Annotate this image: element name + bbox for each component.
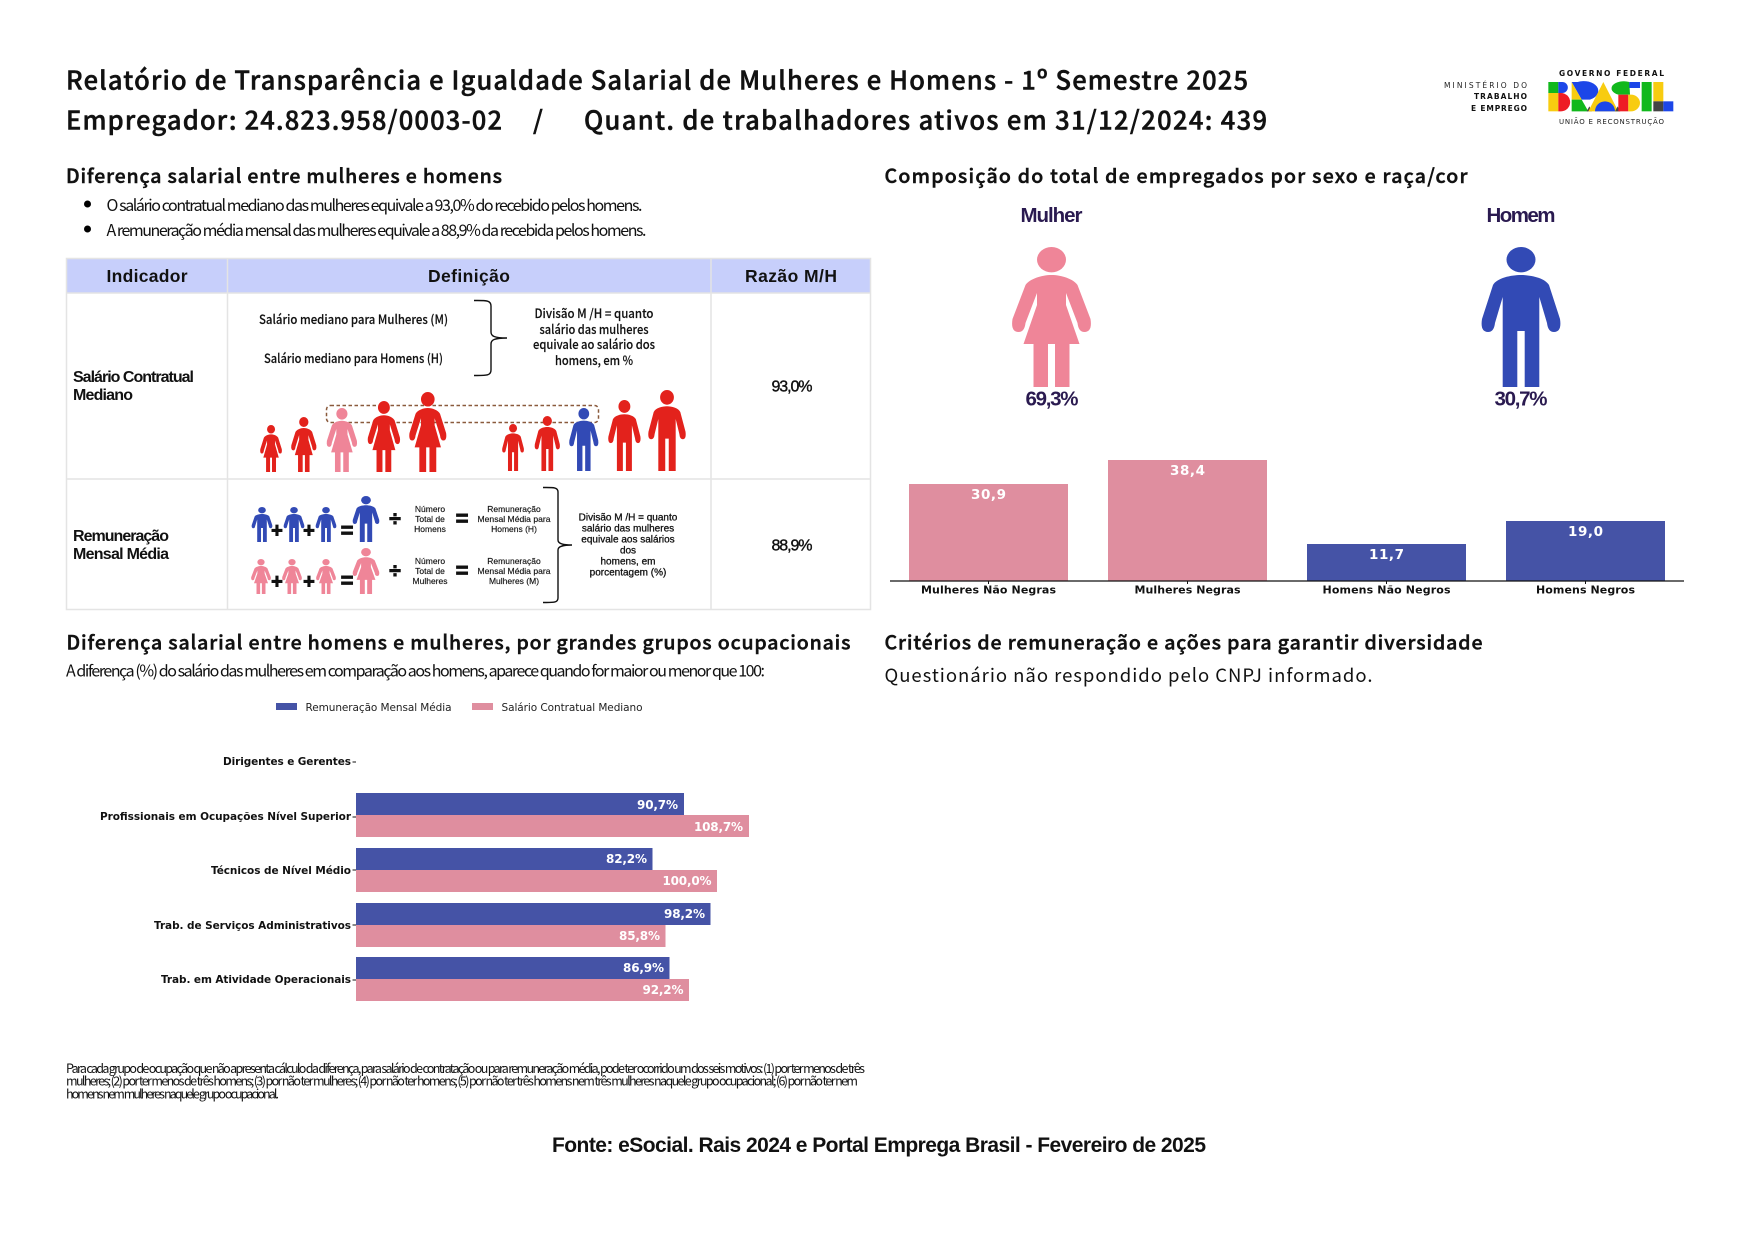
bar chart: sexo e raça/cor: Mulheres Não Negras bbox=[921, 584, 1056, 596]
brace and division text: equivale aos salários bbox=[581, 534, 675, 546]
title bbox=[66, 60, 1267, 138]
definição: salário mediano: Divisão M /H = quanto bbox=[534, 303, 654, 322]
definição: salário mediano: Salário mediano para Homens (H) bbox=[264, 348, 443, 367]
text: questionário: Questionário não respondido pelo CNPJ informado. bbox=[884, 662, 1372, 688]
bar chart: sexo e raça/cor: 11,7 bbox=[1369, 547, 1404, 563]
definição: mulheres: Remuneração bbox=[487, 556, 541, 566]
table header: Indicador bbox=[106, 266, 188, 286]
row label: remuneração mensal média: Remuneração bbox=[73, 528, 169, 545]
bar chart: grupos ocupacionais bbox=[100, 756, 749, 1001]
group: atividade operacionais: 86,9% bbox=[623, 961, 664, 975]
definição: mulheres: Total de bbox=[415, 566, 445, 576]
definição: mulheres: = bbox=[456, 558, 468, 583]
razão: salário: 93,0% bbox=[772, 378, 812, 396]
pictogram: mulher 69,3% bbox=[1012, 204, 1091, 410]
definição: homens: Homens bbox=[414, 524, 446, 534]
heading: diferença por grandes grupos: Diferença salarial entre homens e mulheres, por grandes grupos ocupacionais bbox=[66, 626, 850, 656]
footnote: mulheres; (2) por ter menos de três homens; (3) por não ter mulheres; (4) por não ter homens; (5) por não ter três homens nem três mulheres naquele grupo ocupacional; (6) por não ter nem bbox=[66, 1070, 858, 1090]
pictogram: mulher 69,3%: Mulher bbox=[1020, 204, 1083, 227]
definição: homens bbox=[252, 496, 551, 543]
definição: salário mediano: Salário mediano para Mulheres (M) bbox=[259, 309, 448, 328]
chart legend: Salário Contratual Mediano bbox=[502, 702, 642, 714]
heading: composição: Composição do total de empregados por sexo e raça/cor bbox=[884, 160, 1468, 189]
definição: homens: Número bbox=[415, 504, 445, 514]
title: Empregador: 24.823.958/0003-02 bbox=[66, 100, 502, 138]
definição: mulheres: + bbox=[303, 571, 315, 593]
definição: homens: = bbox=[456, 506, 468, 531]
logo: Ministério do Trabalho e Emprego: E EMPREGO bbox=[1471, 104, 1527, 113]
footnote: homens nem mulheres naquele grupo ocupacional. bbox=[66, 1084, 279, 1102]
group: atividade operacionais: 92,2% bbox=[642, 983, 684, 997]
row label: salário contratual mediano bbox=[73, 369, 194, 404]
definição: homens: = bbox=[341, 518, 353, 543]
logo: Ministério do Trabalho e Emprego: TRABALHO bbox=[1474, 92, 1527, 101]
definição: homens: + bbox=[271, 520, 283, 542]
logo: Ministério do Trabalho e Emprego: MINISTÉRIO DO bbox=[1444, 81, 1527, 90]
group: dirigentes e gerentes: Dirigentes e Gerentes bbox=[223, 756, 351, 768]
definição: mulheres: Número bbox=[415, 556, 445, 566]
footnote bbox=[66, 1058, 865, 1102]
bullet list: A remuneração média mensal das mulheres equivale a 88,9% da recebida pelos homens. bbox=[106, 217, 646, 241]
bar chart: sexo e raça/cor bbox=[890, 460, 1684, 596]
definição: homens: + bbox=[303, 520, 315, 542]
definição: mulheres: ÷ bbox=[389, 560, 401, 583]
logo: Governo Federal Brasil bbox=[1548, 69, 1673, 126]
razão: remuneração: 88,9% bbox=[772, 538, 812, 554]
pictogram: homem 30,7%: 30,7% bbox=[1494, 388, 1548, 410]
definição: salário mediano: equivale ao salário dos bbox=[533, 334, 655, 353]
definição: mulheres: Mulheres bbox=[413, 576, 447, 586]
title: Quant. de trabalhadores ativos em 31/12/2024: 439 bbox=[584, 100, 1267, 138]
bullet list bbox=[84, 192, 646, 241]
group: técnicos nível médio: Técnicos de Nível Médio bbox=[211, 865, 351, 877]
table header: Definição bbox=[428, 266, 510, 286]
pictogram: mediana bbox=[260, 390, 686, 472]
group: serviços administrativos bbox=[154, 903, 710, 947]
definição: mulheres: + bbox=[271, 571, 283, 593]
definição: homens: Homens (H) bbox=[491, 524, 537, 534]
table header bbox=[66, 258, 871, 293]
group: técnicos nível médio: 100,0% bbox=[662, 874, 712, 888]
definição: mulheres: Mulheres (M) bbox=[489, 576, 539, 586]
group: técnicos nível médio bbox=[211, 848, 717, 892]
chart legend: Remuneração Mensal Média bbox=[306, 702, 452, 714]
brace and division text: Divisão M /H = quanto bbox=[579, 512, 678, 524]
definição: mulheres: = bbox=[341, 568, 353, 593]
logo: Governo Federal Brasil: GOVERNO FEDERAL bbox=[1559, 69, 1664, 78]
bar chart: sexo e raça/cor: Homens Não Negros bbox=[1322, 584, 1451, 596]
group: técnicos nível médio: 82,2% bbox=[606, 852, 647, 866]
brace and division text: homens, em bbox=[600, 556, 656, 568]
definição: homens: ÷ bbox=[389, 508, 401, 531]
definição: salário mediano: salário das mulheres bbox=[540, 319, 648, 338]
group: profissionais nível superior: Profissionais em Ocupações Nível Superior bbox=[100, 811, 352, 823]
bar chart: sexo e raça/cor: Mulheres Negras bbox=[1134, 584, 1241, 596]
group: serviços administrativos: Trab. de Serviços Administrativos bbox=[154, 920, 351, 932]
bar chart: sexo e raça/cor: 38,4 bbox=[1170, 463, 1205, 479]
bar chart: sexo e raça/cor: 19,0 bbox=[1568, 524, 1603, 540]
row label: salário contratual mediano: Mediano bbox=[73, 387, 133, 404]
brace and division text bbox=[543, 487, 678, 603]
heading: critérios: Critérios de remuneração e ações para garantir diversidade bbox=[884, 626, 1482, 656]
definição: salário mediano bbox=[259, 300, 655, 376]
group: serviços administrativos: 98,2% bbox=[664, 907, 705, 921]
title: Relatório de Transparência e Igualdade Salarial de Mulheres e Homens - 1º Semestre 2025 bbox=[66, 60, 1248, 98]
pictogram: homem 30,7%: Homem bbox=[1486, 204, 1556, 227]
footnote: Para cada grupo de ocupação que não apresenta cálculo da diferença, para salário de contratação ou para remuneração média, pode ter ocorrido um dos seis motivos: (1) por ter menos de três bbox=[66, 1058, 865, 1077]
group: profissionais nível superior bbox=[100, 793, 749, 837]
title: / bbox=[533, 100, 543, 138]
group: atividade operacionais: Trab. em Atividade Operacionais bbox=[161, 974, 351, 986]
bar chart: sexo e raça/cor: Homens Negros bbox=[1536, 584, 1635, 596]
subtitle: A diferença (%) do salário das mulheres em comparação aos homens, aparece quando for maior ou menor que 100: bbox=[66, 658, 765, 682]
definição: salário mediano: homens, em % bbox=[555, 350, 633, 369]
definição: homens: Total de bbox=[415, 514, 445, 524]
bullet list: O salário contratual mediano das mulheres equivale a 93,0% do recebido pelos homens. bbox=[106, 192, 642, 216]
pictogram: mulher 69,3%: 69,3% bbox=[1026, 388, 1078, 410]
chart legend bbox=[276, 702, 642, 714]
logo: Governo Federal Brasil: UNIÃO E RECONSTRUÇÃO bbox=[1559, 117, 1664, 126]
group: profissionais nível superior: 90,7% bbox=[637, 798, 678, 812]
bar chart: sexo e raça/cor: 30,9 bbox=[971, 487, 1006, 503]
brace and division text: dos bbox=[620, 546, 636, 556]
heading: diferença salarial: Diferença salarial entre mulheres e homens bbox=[66, 160, 502, 189]
logo: Ministério do Trabalho e Emprego bbox=[1444, 81, 1527, 113]
table: indicadores bbox=[66, 258, 871, 610]
definição: mulheres bbox=[251, 548, 551, 594]
pictogram: homem 30,7% bbox=[1482, 204, 1560, 410]
group: serviços administrativos: 85,8% bbox=[619, 929, 660, 943]
definição: homens: Remuneração bbox=[487, 504, 541, 514]
brace and division text: salário das mulheres bbox=[582, 524, 674, 534]
definição: mulheres: Mensal Média para bbox=[478, 566, 551, 576]
row label: remuneração mensal média bbox=[73, 528, 169, 563]
brace and division text: porcentagem (%) bbox=[590, 568, 666, 578]
source: Fonte: eSocial. Rais 2024 e Portal Emprega Brasil - Fevereiro de 2025 bbox=[552, 1134, 1206, 1157]
table header: Razão M/H bbox=[745, 266, 837, 286]
group: atividade operacionais bbox=[161, 957, 689, 1001]
row label: remuneração mensal média: Mensal Média bbox=[73, 546, 169, 563]
row label: salário contratual mediano: Salário Contratual bbox=[73, 369, 194, 386]
group: profissionais nível superior: 108,7% bbox=[694, 820, 743, 834]
definição: homens: Mensal Média para bbox=[478, 514, 551, 524]
